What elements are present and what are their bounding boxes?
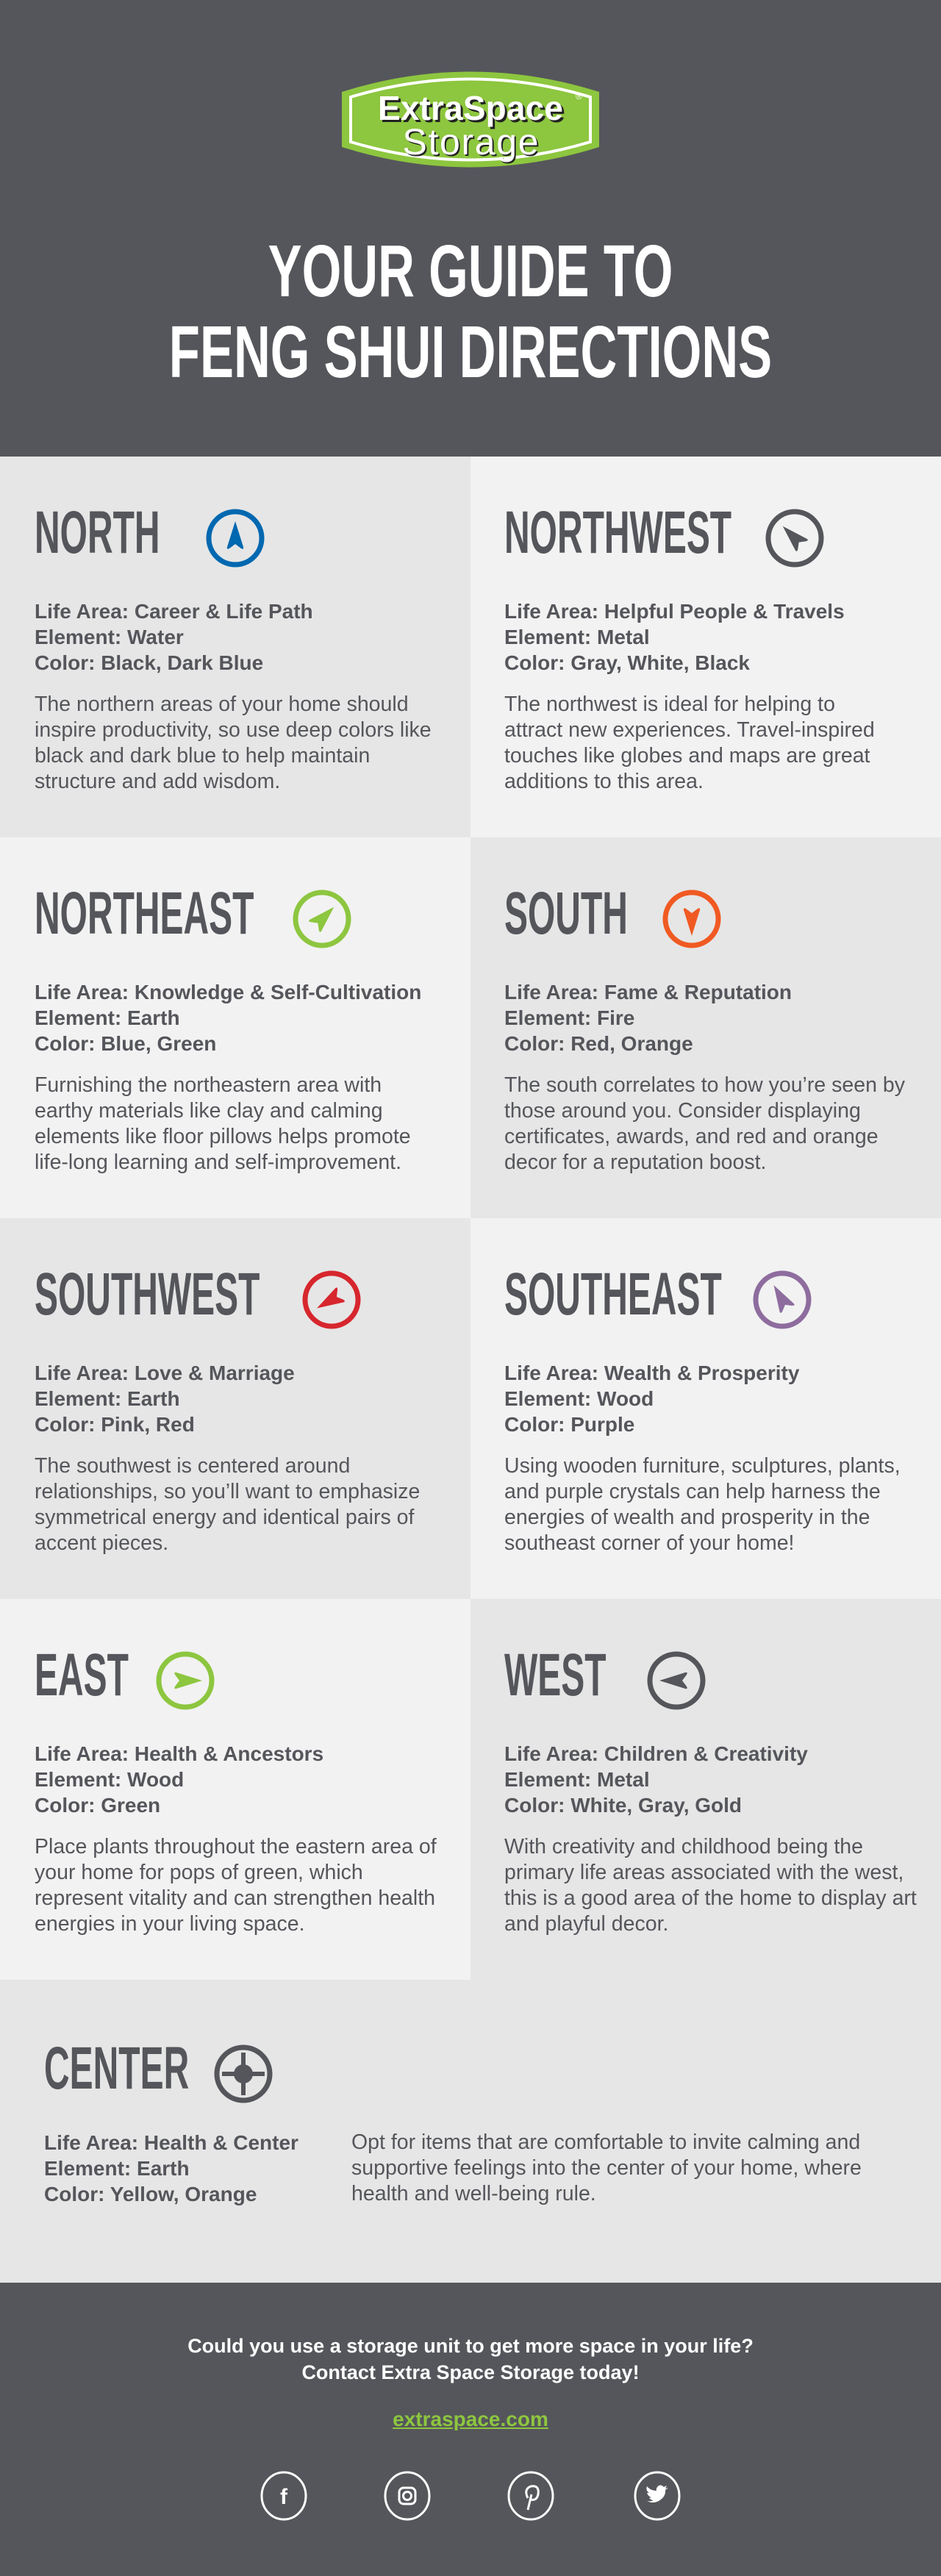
heading: northwest: NORTHWEST xyxy=(504,499,731,566)
info: west: Color: White, Gray, Gold xyxy=(504,1794,742,1817)
panel: center xyxy=(0,1980,941,2283)
icon: west arrow xyxy=(647,1651,706,1710)
info: west xyxy=(504,1742,808,1817)
info: northwest: Color: Gray, White, Black xyxy=(504,651,750,674)
text: west: and playful decor. xyxy=(504,1912,668,1936)
info: southwest: Color: Pink, Red xyxy=(35,1413,195,1436)
icon: southwest arrow xyxy=(303,1270,360,1329)
heading: south: SOUTH xyxy=(504,880,628,947)
text: northeast: Furnishing the northeastern area with earthy materials like clay and calming elements like floor pillows helps promote life-long learning and self-improvement. xyxy=(35,1073,411,1174)
text: west xyxy=(504,1835,917,1936)
info: northeast: Color: Blue, Green xyxy=(35,1032,216,1055)
info: southeast: Color: Purple xyxy=(504,1413,634,1436)
icon: southeast arrow xyxy=(753,1270,812,1329)
info: northwest: Life Area: Helpful People & Travels xyxy=(504,600,845,623)
text: southeast: Using wooden furniture, sculptures, plants, and purple crystals can help harness the energies of wealth and prosperity in the southeast corner of your home! xyxy=(504,1454,901,1555)
heading: east: EAST xyxy=(35,1642,129,1709)
info: west: Element: Metal xyxy=(504,1768,650,1791)
info: north: Element: Water xyxy=(35,626,184,648)
text: east: Place plants throughout the eastern area of your home for pops of green, which represent vitality and can strengthen health energies in your living space. xyxy=(35,1835,437,1936)
text: center: Opt for items that are comfortable to invite calming and supportive feelings into the center of your home, where health and well-being rule. xyxy=(351,2130,862,2205)
title: FENG SHUI DIRECTIONS xyxy=(169,311,772,393)
info: center: Element: Earth xyxy=(44,2157,190,2180)
icon: south arrow xyxy=(663,890,720,948)
text: north: The northern areas of your home should inspire productivity, so use deep colors like black and dark blue to help maintain structure and add wisdom. xyxy=(35,693,432,793)
footer text xyxy=(187,2335,754,2383)
info: north: Life Area: Career & Life Path xyxy=(35,600,313,623)
heading: north: NORTH xyxy=(35,499,160,566)
header xyxy=(0,0,941,457)
footer text: Contact Extra Space Storage today! xyxy=(301,2361,640,2383)
panel: east xyxy=(0,1599,470,1980)
info: southwest: Life Area: Love & Marriage xyxy=(35,1362,295,1384)
footer text: Could you use a storage unit to get more space in your life? xyxy=(187,2335,754,2357)
text: northwest xyxy=(504,693,875,793)
icon: center crosshair xyxy=(215,2045,272,2103)
panel: northeast xyxy=(0,837,470,1218)
info: southeast: Element: Wood xyxy=(504,1387,654,1410)
text: southwest: The southwest is centered around relationships, so you’ll want to emphasize symmetrical energy and identical pairs of accent pieces. xyxy=(35,1454,420,1555)
info: northeast: Element: Earth xyxy=(35,1006,180,1029)
info: southwest xyxy=(35,1362,295,1436)
social icons xyxy=(260,2472,681,2520)
icon: northeast arrow xyxy=(293,890,351,948)
heading: northeast: NORTHEAST xyxy=(35,880,254,947)
panel: southwest xyxy=(0,1218,470,1599)
info: east xyxy=(35,1742,323,1817)
heading: west: WEST xyxy=(504,1642,607,1709)
panel: north xyxy=(0,457,470,837)
info: south: Life Area: Fame & Reputation xyxy=(504,981,792,1003)
panel: northwest xyxy=(470,457,941,837)
title xyxy=(169,230,772,393)
info: east: Element: Wood xyxy=(35,1768,184,1791)
panel: south xyxy=(470,837,941,1218)
link: extraspace.com xyxy=(393,2408,548,2430)
info: center xyxy=(44,2131,298,2205)
heading: southeast: SOUTHEAST xyxy=(504,1261,722,1328)
logo: ExtraSpace xyxy=(380,91,565,129)
footer xyxy=(0,2283,941,2576)
info: northwest: Element: Metal xyxy=(504,626,650,648)
logo: Storage xyxy=(404,123,540,164)
info: northeast xyxy=(35,981,421,1055)
info: north: Color: Black, Dark Blue xyxy=(35,651,263,674)
info: south: Element: Fire xyxy=(504,1006,634,1029)
panel: southeast xyxy=(470,1218,941,1599)
text: west: this is a good area of the home to display art xyxy=(504,1886,917,1910)
logo: ExtraSpace xyxy=(378,89,563,127)
heading: southwest: SOUTHWEST xyxy=(35,1261,260,1328)
info: west: Life Area: Children & Creativity xyxy=(504,1742,808,1765)
info: northwest xyxy=(504,600,845,674)
icon: north arrow xyxy=(206,509,265,568)
logo xyxy=(342,72,599,168)
text: south: The south correlates to how you’re seen by those around you. Consider displaying certificates, awards, and red and orange decor for a reputation boost. xyxy=(504,1073,905,1174)
info: center: Color: Yellow, Orange xyxy=(44,2183,257,2205)
panel: west xyxy=(470,1599,941,1980)
info: southwest: Element: Earth xyxy=(35,1387,180,1410)
logo: Storage xyxy=(403,121,538,162)
text: northwest: additions to this area. xyxy=(504,770,704,793)
text: west: primary life areas associated with the west, xyxy=(504,1861,904,1884)
social icons: f xyxy=(280,2485,288,2509)
info: southeast xyxy=(504,1362,800,1436)
text: northwest: attract new experiences. Travel-inspired xyxy=(504,718,875,742)
text: northwest: The northwest is ideal for helping to xyxy=(504,693,835,716)
info: south: Color: Red, Orange xyxy=(504,1032,693,1055)
title: YOUR GUIDE TO xyxy=(268,230,673,312)
info: east: Color: Green xyxy=(35,1794,160,1817)
info: east: Life Area: Health & Ancestors xyxy=(35,1742,323,1765)
info: center: Life Area: Health & Center xyxy=(44,2131,298,2154)
info: north xyxy=(35,600,313,674)
logo: ® xyxy=(576,91,582,101)
info: south xyxy=(504,981,792,1055)
heading: center: CENTER xyxy=(44,2035,189,2102)
text: northwest: touches like globes and maps are great xyxy=(504,744,870,768)
text: west: With creativity and childhood being the xyxy=(504,1835,863,1858)
info: southeast: Life Area: Wealth & Prosperity xyxy=(504,1362,799,1384)
icon: east arrow xyxy=(156,1651,215,1710)
info: northeast: Life Area: Knowledge & Self-Cultivation xyxy=(35,981,421,1003)
icon: northwest arrow xyxy=(766,509,823,568)
